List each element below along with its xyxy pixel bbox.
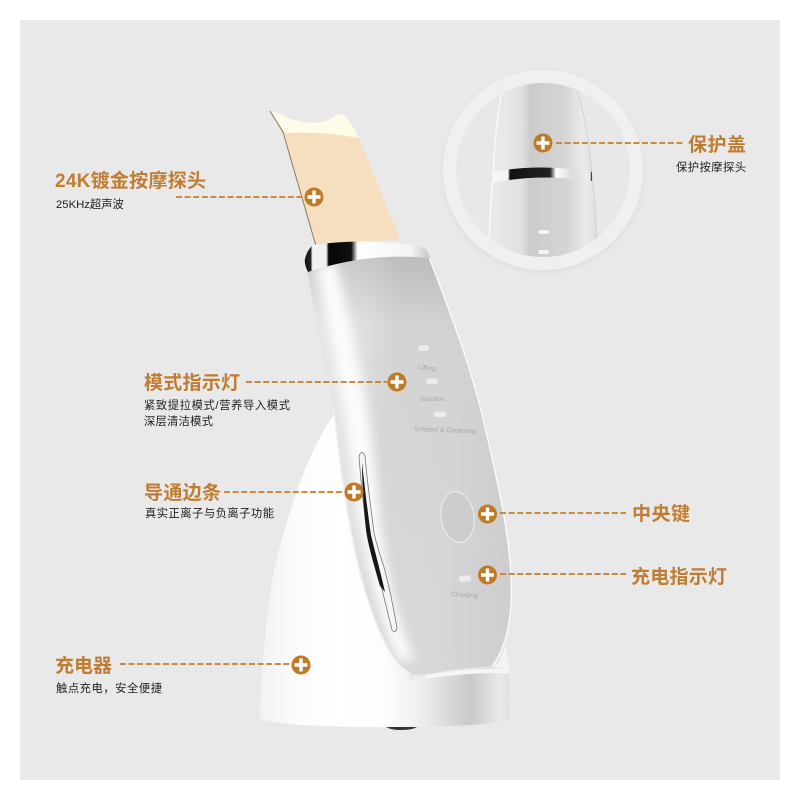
callout: protective cap: 保护按摩探头 — [676, 160, 746, 174]
callout: mode indicator lights: 深层清洁模式 — [144, 414, 213, 428]
mode indicator lights: Lifting — [418, 364, 436, 373]
callout: protective cap — [534, 134, 746, 174]
dock contact foot — [386, 727, 417, 730]
callout: charger: 充电器 — [55, 654, 112, 677]
callout: charger — [55, 654, 310, 695]
callout: 24K gold head: 25KHz超声波 — [56, 197, 124, 211]
callout: conductive strip — [144, 482, 364, 520]
callout: 24K gold head — [55, 169, 324, 211]
callout: mode indicator lights: 紧致提拉模式/营养导入模式 — [144, 398, 290, 412]
callout: charger: 触点充电，安全便捷 — [56, 681, 162, 695]
callout: mode indicator lights: 模式指示灯 — [144, 372, 240, 394]
gold massage head — [270, 111, 400, 246]
charging dock — [260, 415, 510, 730]
mode indicator lights — [414, 346, 476, 435]
charging light: Charging — [451, 591, 478, 599]
callout: charging light: 充电指示灯 — [631, 565, 727, 588]
callout: conductive strip: 真实正离子与负离子功能 — [145, 506, 274, 520]
callout: central button: 中央键 — [632, 503, 690, 525]
charging light — [451, 576, 478, 599]
mode indicator lights: Nutrition — [420, 396, 445, 403]
cap body — [523, 83, 591, 171]
inset: protective cap circle — [489, 83, 597, 270]
callout: charging light — [478, 565, 727, 588]
lower body — [522, 178, 596, 257]
mode indicator lights: Softpeel & Cleansing — [414, 426, 476, 435]
callout: 24K gold head: 24K镀金按摩探头 — [55, 169, 206, 192]
handle body — [307, 256, 512, 675]
callout: central button — [478, 503, 690, 525]
callout: mode indicator lights — [144, 372, 406, 428]
central button — [438, 489, 477, 545]
callout: conductive strip: 导通边条 — [144, 482, 221, 504]
chrome band — [492, 168, 592, 183]
chrome collar — [305, 242, 430, 272]
side conductive strip — [359, 452, 397, 632]
callout: protective cap: 保护盖 — [688, 134, 746, 156]
device — [270, 111, 512, 675]
